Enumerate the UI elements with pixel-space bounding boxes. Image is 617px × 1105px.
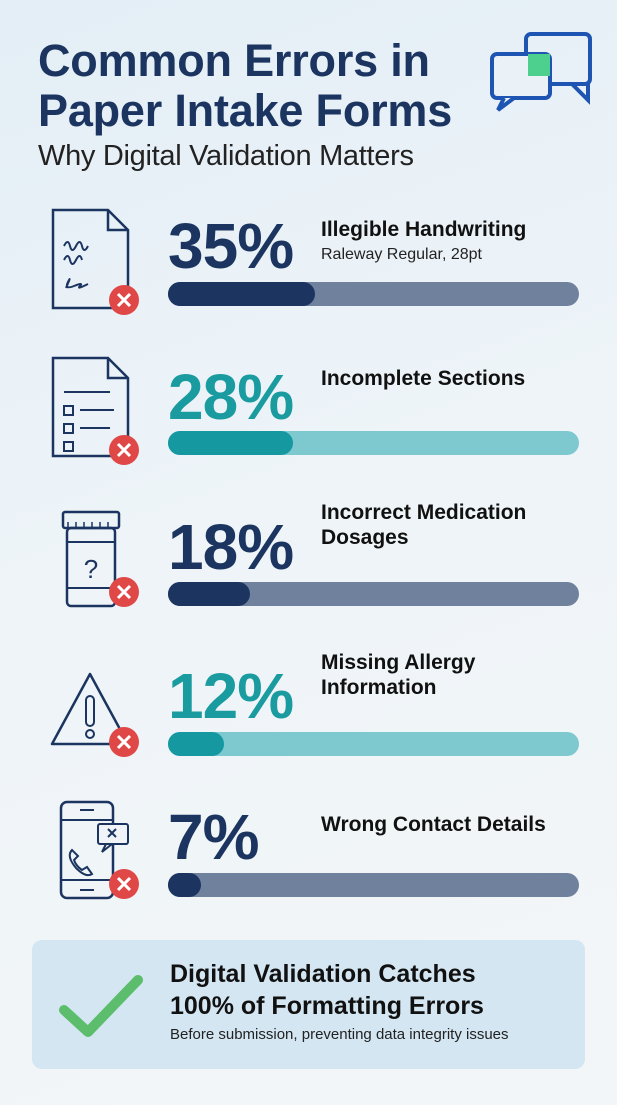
- icon: phone with message: [60, 800, 139, 900]
- label: [321, 651, 476, 699]
- icon: checklist doc: [52, 356, 139, 465]
- icon: pill bottle: [62, 510, 139, 608]
- label: Dosages: [321, 526, 409, 549]
- percentage 28%: 28%: [168, 361, 293, 433]
- label: [321, 501, 526, 549]
- icon: handwritten doc: [52, 208, 139, 315]
- callout heading: [170, 960, 484, 1020]
- percentage 18%: 18%: [168, 511, 293, 583]
- percentage 35%: 35%: [168, 210, 293, 282]
- callout: digital validation: [32, 940, 585, 1069]
- label: Incomplete Sections: [321, 367, 525, 390]
- bar 12%: [168, 732, 579, 756]
- row 4: allergy: [50, 651, 579, 757]
- row 3: medication: [62, 501, 579, 608]
- bar 35%: [168, 282, 579, 306]
- sublabel: Raleway Regular, 28pt: [321, 246, 482, 263]
- callout text: Before submission, preventing data integrity issues: [170, 1026, 509, 1043]
- row 2: incomplete sections: [52, 356, 579, 465]
- percentage 7%: 7%: [168, 801, 258, 873]
- percentage 12%: 12%: [168, 660, 293, 732]
- title: [38, 35, 452, 136]
- callout heading: Digital Validation Catches: [170, 960, 476, 988]
- callout heading: 100% of Formatting Errors: [170, 992, 484, 1020]
- icon: pill bottle: ?: [84, 554, 98, 584]
- subtitle: Why Digital Validation Matters: [38, 140, 414, 172]
- label: Missing Allergy: [321, 651, 475, 674]
- label: Illegible Handwriting: [321, 218, 526, 241]
- bar 7%: [168, 873, 579, 897]
- title: Paper Intake Forms: [38, 85, 452, 136]
- row 5: contact: [60, 800, 579, 900]
- row 1: illegible handwriting: [52, 208, 579, 315]
- label: Information: [321, 676, 436, 699]
- bar 28%: [168, 431, 579, 455]
- label: Incorrect Medication: [321, 501, 526, 524]
- label: Wrong Contact Details: [321, 813, 546, 836]
- icon: green check: [59, 975, 143, 1037]
- title: Common Errors in: [38, 35, 430, 86]
- bar 18%: [168, 582, 579, 606]
- icon: warning triangle: [50, 672, 139, 757]
- icon: chat bubbles: [490, 32, 592, 112]
